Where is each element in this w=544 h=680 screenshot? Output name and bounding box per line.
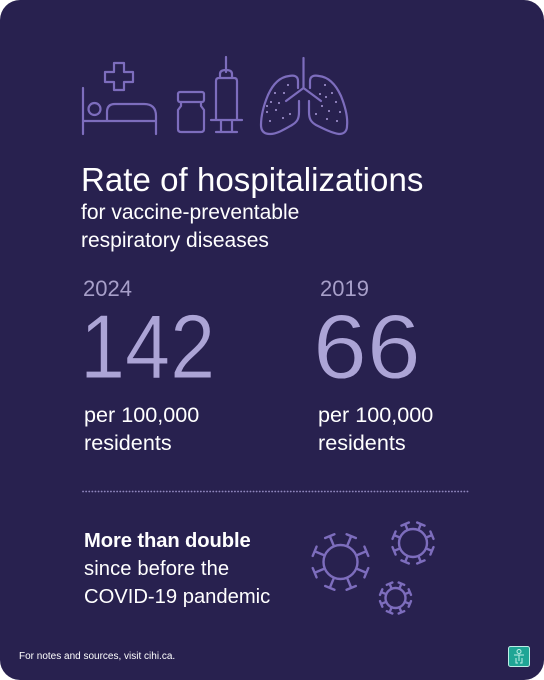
rate caption 2019: per 100,000 [318, 402, 433, 427]
stat 142: 142 [80, 297, 215, 398]
subtitle [81, 201, 299, 252]
stat 66: 66 [313, 297, 421, 398]
subtitle: for vaccine-preventable [81, 201, 299, 224]
rate caption 2024: per 100,000 [84, 402, 199, 427]
footer note: For notes and sources, visit cihi.ca. [19, 651, 175, 662]
rate caption 2019: residents [318, 430, 406, 455]
callout text: since before the [84, 558, 229, 580]
rate caption 2024: residents [84, 430, 172, 455]
icon: medium virus [393, 523, 433, 563]
icon: large virus [313, 534, 368, 590]
year label 2019: 2019 [320, 276, 369, 301]
title: Rate of hospitalizations [81, 161, 423, 198]
callout text: COVID-19 pandemic [84, 586, 270, 608]
subtitle: respiratory diseases [81, 229, 269, 252]
year label 2024: 2024 [83, 276, 132, 301]
icon: lungs [261, 58, 347, 134]
icon: small virus [380, 583, 411, 613]
callout text: More than double [84, 530, 251, 552]
callout text [84, 530, 270, 608]
icon: accessibility badge [508, 646, 530, 667]
rate caption 2024 [84, 402, 199, 455]
icon: hospital bed with cross [83, 63, 156, 134]
icon: vaccine vial and syringe [178, 57, 242, 132]
rate caption 2019 [318, 402, 433, 455]
